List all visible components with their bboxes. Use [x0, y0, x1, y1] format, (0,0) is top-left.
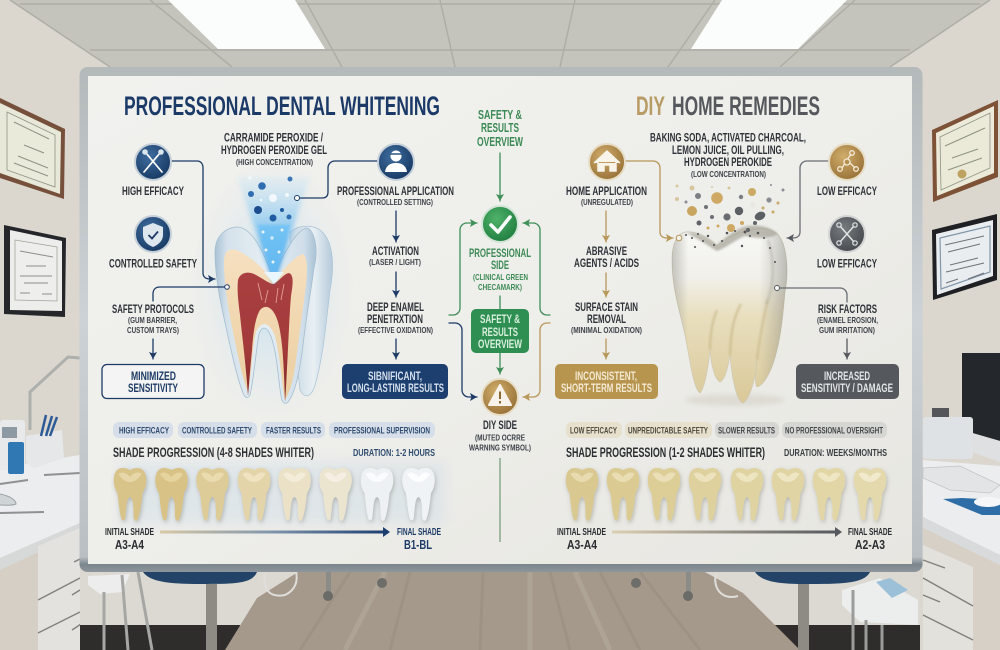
arrow — [499, 353, 501, 374]
left benefit pills: FASTER RESULTS — [266, 426, 321, 436]
right initial shade: A3-A4 — [567, 537, 598, 552]
box: minimized sensitivity: SENSITIVITY — [128, 383, 178, 395]
text: safety protocols: SAFETY PROTOCOLS — [112, 304, 194, 316]
box: minimized sensitivity — [102, 364, 204, 398]
icon: home — [589, 144, 625, 180]
stain particles — [675, 184, 784, 232]
label: low efficacy second: LOW EFFICACY — [817, 258, 877, 270]
text: deep enamel penetration: DEEP ENAMEL — [367, 302, 424, 314]
text: professional application: PROFESSIONAL APPLICATION — [337, 186, 454, 198]
right initial shade: INITIAL SHADE — [557, 527, 606, 538]
right product label: (LOW CONCENTRATION) — [691, 169, 766, 179]
text: deep enamel penetration: (EFFECTIVE OXIDATION) — [358, 325, 433, 335]
center column heading: RESULTS — [481, 120, 519, 135]
box: significant results: SIBNIFICANT, — [368, 371, 422, 383]
center column heading — [477, 107, 523, 149]
text: professional application: (CONTROLLED SETTING) — [357, 197, 433, 207]
box: inconsistent results: INCONSISTENT, — [575, 371, 637, 383]
icon: high efficacy tools — [135, 144, 171, 180]
box: increased sensitivity: INCREASED — [824, 371, 870, 383]
left duration: DURATION: 1-2 HOURS — [353, 447, 435, 459]
text: deep enamel penetration — [358, 302, 433, 335]
arrow — [846, 339, 848, 359]
text: DIY side: DIY SIDE — [483, 420, 517, 432]
text: activation: ACTIVATION — [372, 246, 419, 258]
right final shade: FINAL SHADE — [848, 527, 892, 538]
text: professional side: CHECAMARK) — [478, 282, 522, 292]
icon: controlled safety shield — [135, 216, 171, 252]
tooth surface crater — [686, 225, 778, 251]
connector: low efficacy to tooth — [787, 161, 829, 238]
text: home application: (UNREGULATED) — [581, 197, 633, 207]
text: abrasive agents: AGENTS / ACIDS — [574, 258, 639, 270]
text: home application — [566, 186, 647, 207]
right product label: LEMON JUICE, OIL PULLING, — [672, 145, 784, 157]
connector: green left — [449, 223, 477, 315]
right shade progression heading: SHADE PROGRESSION (1-2 SHADES WHITER) — [566, 445, 765, 460]
connector: high efficacy to tooth — [172, 161, 215, 279]
box: significant results: LONG-LASTINB RESULTS — [347, 383, 444, 395]
dental unit left — [88, 572, 152, 650]
dentin — [224, 250, 307, 400]
icon: ochre warning — [482, 379, 518, 415]
right final shade: A2-A3 — [855, 537, 885, 552]
text: professional side: (CLINICAL GREEN — [473, 272, 528, 282]
floor and lower room — [80, 572, 920, 650]
box: increased sensitivity: SENSITIVITY / DAMAGE — [801, 383, 893, 395]
box: minimized sensitivity: MINIMIZED — [131, 371, 176, 383]
text: professional side — [469, 248, 531, 292]
center column heading: OVERVIEW — [477, 134, 523, 149]
label: low efficacy: LOW EFFICACY — [817, 186, 877, 198]
ceiling light right — [691, 0, 847, 49]
text: surface stain removal: SURFACE STAIN — [575, 302, 638, 314]
right desk with computer — [923, 353, 1000, 650]
connector: navy to warning — [449, 323, 477, 397]
text: professional side: PROFESSIONAL — [469, 248, 531, 260]
certificate: lower left — [4, 225, 66, 317]
dental unit right — [842, 578, 918, 650]
icon: molecule gray — [829, 216, 865, 252]
glass panel frame — [80, 67, 922, 572]
chair right — [631, 572, 870, 650]
arrow — [395, 211, 397, 242]
box: safety and results overview: SAFETY & — [480, 314, 520, 326]
text: risk factors — [817, 304, 878, 335]
left tooth shade row — [114, 462, 445, 524]
right initial shade — [557, 527, 606, 552]
text: surface stain removal: REMOVAL — [587, 314, 626, 326]
center column heading: SAFETY & — [478, 107, 522, 122]
gel beam — [237, 177, 310, 284]
text: risk factors: GUM IRRITATION) — [819, 325, 875, 335]
certificate: top right — [932, 100, 998, 202]
box: increased sensitivity — [796, 364, 899, 399]
connector: green right — [523, 223, 550, 315]
left heading: PROFESSIONAL DENTAL WHITENING — [124, 91, 440, 121]
DIY tooth — [672, 184, 787, 406]
arrow — [499, 153, 501, 201]
box: inconsistent results — [555, 364, 658, 399]
text: activation — [369, 246, 421, 267]
text: home application: HOME APPLICATION — [566, 186, 647, 198]
text: safety protocols: CUSTOM TRAYS) — [127, 325, 179, 335]
right duration: DURATION: WEEKS/MONTHS — [784, 447, 887, 459]
text: risk factors: RISK FACTORS — [818, 304, 877, 316]
left benefit pills: PROFESSIONAL SUPERVISION — [334, 426, 430, 436]
text: activation: (LASER / LIGHT) — [369, 257, 421, 267]
right product label: BAKING SODA, ACTIVATED CHARCOAL, — [650, 132, 806, 144]
left initial shade — [105, 527, 154, 552]
arrow — [395, 272, 397, 297]
right tooth shade row — [566, 468, 886, 521]
icon: green checkmark — [482, 206, 518, 242]
left shade arrow — [160, 527, 390, 537]
label: high efficacy: HIGH EFFICACY — [122, 186, 184, 198]
right drawback pills: UNPREDICTABLE SAFETY — [628, 426, 708, 436]
left benefit pills: CONTROLLED SAFETY — [182, 426, 252, 436]
left final shade — [397, 527, 441, 552]
connector: home application to tooth — [625, 161, 682, 241]
icon: professional application dentist — [378, 144, 414, 180]
certificate: lower right — [932, 214, 997, 300]
arrow — [605, 339, 607, 359]
ceiling light left — [168, 0, 325, 49]
text: abrasive agents: ABRASIVE — [586, 246, 627, 258]
left desk with devices — [0, 357, 90, 650]
enamel — [215, 227, 316, 403]
stain speckles on tooth — [685, 230, 776, 263]
gel bubbles — [248, 176, 292, 264]
left product label: CARRAMIDE PEROXIDE / — [224, 132, 324, 144]
certificate: top left — [0, 98, 65, 199]
box: safety and results overview: OVERVIEW — [478, 339, 522, 351]
text: surface stain removal: (MINIMAL OXIDATION) — [571, 325, 642, 335]
text: safety protocols — [112, 304, 194, 335]
text: deep enamel penetration: PENETRXTION — [367, 314, 423, 326]
right drawback pills — [566, 422, 887, 438]
right final shade — [848, 527, 892, 552]
tooth cross-section with whitening gel — [190, 160, 354, 420]
arrow — [152, 339, 154, 359]
left final shade: FINAL SHADE — [397, 527, 441, 538]
left benefit pills — [113, 422, 435, 438]
left product label — [221, 132, 327, 167]
right drawback pills: NO PROFESSIONAL OVERSIGHT — [785, 426, 883, 436]
text: safety protocols: (GUM BARRIER, — [128, 315, 177, 325]
connector: tooth to risk factors — [774, 286, 847, 302]
back tooth — [290, 226, 332, 396]
pulp — [238, 273, 293, 402]
left final shade: B1-BL — [404, 537, 432, 552]
connector: tooth to safety protocols — [153, 285, 229, 301]
left benefit pills: HIGH EFFICACY — [119, 426, 169, 436]
text: professional side: SIDE — [491, 260, 509, 272]
arrow — [395, 339, 397, 359]
chair left — [143, 572, 387, 650]
box: safety and results overview: RESULTS — [482, 327, 518, 339]
box: significant results — [342, 364, 448, 399]
connector: professional application to gel — [294, 161, 378, 200]
right shade arrow — [612, 527, 842, 537]
left product label: HYDROGEN PEROXIDE GEL — [221, 145, 327, 157]
arrow — [605, 273, 607, 297]
left shade progression heading: SHADE PROGRESSION (4-8 SHADES WHITER) — [113, 445, 314, 460]
arrow — [605, 211, 607, 242]
text: abrasive agents — [574, 246, 639, 270]
box: inconsistent results: SHORT-TERM RESULTS — [561, 383, 652, 395]
text: DIY side: WARNING SYMBOL) — [469, 442, 531, 452]
text: risk factors: (ENAMEL EROSION, — [817, 315, 878, 325]
right product label — [650, 132, 806, 179]
text: DIY side: (MUTED OCRRE — [475, 432, 525, 442]
right heading: DIY — [636, 91, 665, 121]
label: controlled safety: CONTROLLED SAFETY — [109, 258, 197, 270]
left product label: (HIGH CONCENTRATION) — [236, 157, 313, 167]
box: safety and results overview — [471, 309, 529, 353]
right heading — [636, 91, 820, 121]
icon: molecule ochre — [829, 144, 865, 180]
text: surface stain removal — [571, 302, 642, 335]
text: DIY side — [469, 420, 531, 452]
right drawback pills: LOW EFFICACY — [570, 426, 617, 436]
infographic panel — [88, 76, 912, 564]
right drawback pills: SLOWER RESULTS — [718, 426, 775, 436]
connector: ochre to warning — [523, 323, 550, 397]
left initial shade: A3-A4 — [115, 537, 145, 552]
right product label: HYDROGEN PEROKIDE — [684, 157, 772, 169]
text: professional application — [337, 186, 454, 207]
left initial shade: INITIAL SHADE — [105, 527, 154, 538]
right heading: HOME REMEDIES — [672, 91, 820, 121]
